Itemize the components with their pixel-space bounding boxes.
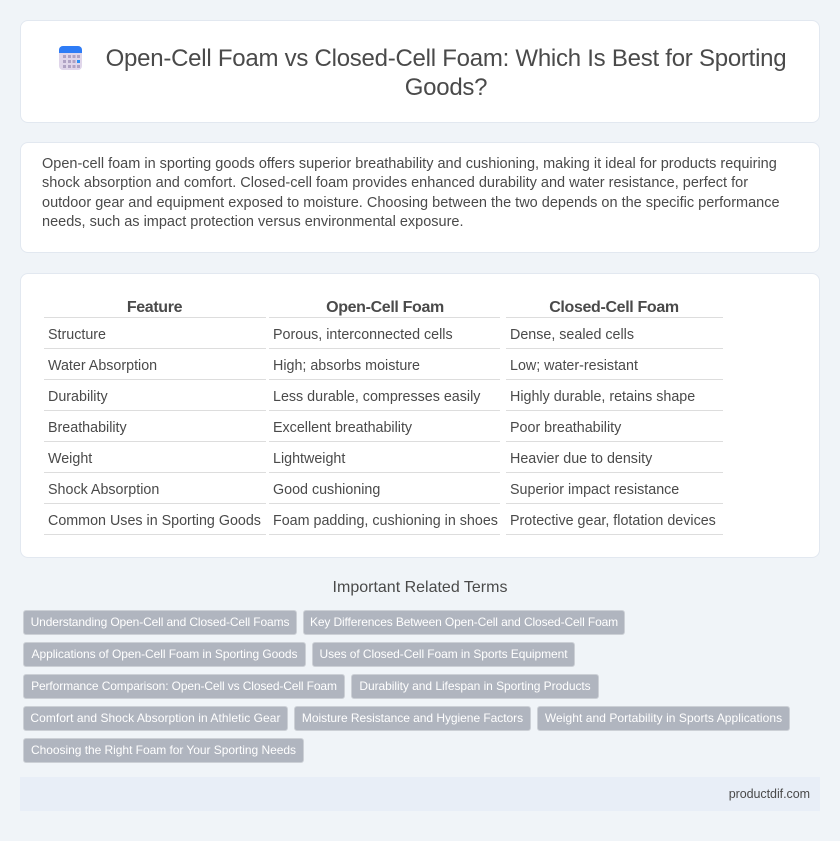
row: breathability: Poor breathability xyxy=(510,420,621,436)
tag xyxy=(23,738,304,763)
row: shock absorption: Superior impact resistance xyxy=(510,482,679,498)
intro paragraph: shock absorption and comfort. Closed-cell foam provides enhanced durability and water resistance, perfect for xyxy=(42,175,748,191)
row: breathability: Breathability xyxy=(48,420,127,436)
intro paragraph: needs, such as impact protection versus environmental exposure. xyxy=(42,214,464,230)
row: durability: Highly durable, retains shape xyxy=(510,389,695,405)
row: weight: Lightweight xyxy=(273,451,345,467)
row: water absorption: High; absorbs moisture xyxy=(273,358,420,374)
row: durability xyxy=(48,389,695,405)
row: weight xyxy=(48,451,652,467)
panel: intro text card xyxy=(20,142,820,253)
related term tags xyxy=(23,610,790,763)
row: breathability xyxy=(48,420,622,436)
table header: Feature xyxy=(127,299,182,316)
row: common uses xyxy=(48,513,716,529)
tag: Durability and Lifespan in Sporting Products xyxy=(359,679,591,693)
tag: Understanding Open-Cell and Closed-Cell Foams xyxy=(31,615,289,629)
row: durability: Durability xyxy=(48,389,108,405)
tag: Choosing the Right Foam for Your Sporting Needs xyxy=(31,743,296,757)
tag: Performance Comparison: Open-Cell vs Closed-Cell Foam xyxy=(31,679,337,693)
tag xyxy=(303,610,625,635)
tag: Key Differences Between Open-Cell and Closed-Cell Foam xyxy=(310,615,618,629)
title: Open-Cell Foam vs Closed-Cell Foam: Which Is Best for Sporting xyxy=(106,45,786,72)
row: water absorption: Low; water-resistant xyxy=(510,358,638,374)
row: structure: Dense, sealed cells xyxy=(510,327,634,343)
tag xyxy=(23,674,345,699)
intro paragraph: Open-cell foam in sporting goods offers superior breathability and cushioning, making it ideal for products requiring xyxy=(42,156,777,172)
icon: calendar xyxy=(59,46,82,70)
row: durability: Less durable, compresses easily xyxy=(273,389,480,405)
row: shock absorption: Shock Absorption xyxy=(48,482,159,498)
tag: Uses of Closed-Cell Foam in Sports Equipment xyxy=(320,647,567,661)
table header: Open-Cell Foam xyxy=(326,299,444,316)
title xyxy=(106,45,786,101)
tag xyxy=(351,674,599,699)
tag xyxy=(23,610,297,635)
footer bar xyxy=(20,777,820,811)
row: structure: Porous, interconnected cells xyxy=(273,327,453,343)
row: breathability: Excellent breathability xyxy=(273,420,412,436)
row: common uses: Protective gear, flotation devices xyxy=(510,513,716,529)
intro paragraph xyxy=(42,156,780,230)
tag: Comfort and Shock Absorption in Athletic Gear xyxy=(30,711,281,725)
tag xyxy=(312,642,575,667)
row: weight: Weight xyxy=(48,451,92,467)
panel: title card xyxy=(20,20,820,123)
table header xyxy=(127,299,679,316)
row: common uses: Common Uses in Sporting Goods xyxy=(48,513,261,529)
row: common uses: Foam padding, cushioning in shoes xyxy=(273,513,498,529)
row: shock absorption: Good cushioning xyxy=(273,482,380,498)
heading: related terms: Important Related Terms xyxy=(333,579,507,596)
comparison table xyxy=(44,299,723,535)
table header: Closed-Cell Foam xyxy=(549,299,679,316)
row: weight: Heavier due to density xyxy=(510,451,652,467)
tag: Applications of Open-Cell Foam in Sporting Goods xyxy=(32,647,297,661)
tag: Moisture Resistance and Hygiene Factors xyxy=(302,711,523,725)
tag xyxy=(537,706,790,731)
panel: comparison table card xyxy=(20,273,820,558)
tag xyxy=(294,706,531,731)
tag: Weight and Portability in Sports Applications xyxy=(545,711,782,725)
row: water absorption xyxy=(48,358,638,374)
footer credit: productdif.com xyxy=(729,787,810,801)
row: structure: Structure xyxy=(48,327,106,343)
tag xyxy=(23,642,306,667)
title: Goods? xyxy=(405,74,487,101)
row: water absorption: Water Absorption xyxy=(48,358,157,374)
tag xyxy=(23,706,288,731)
row: structure xyxy=(48,327,634,343)
intro paragraph: outdoor gear and equipment exposed to moisture. Choosing between the two depends on the specific performance xyxy=(42,195,780,211)
row: shock absorption xyxy=(48,482,679,498)
